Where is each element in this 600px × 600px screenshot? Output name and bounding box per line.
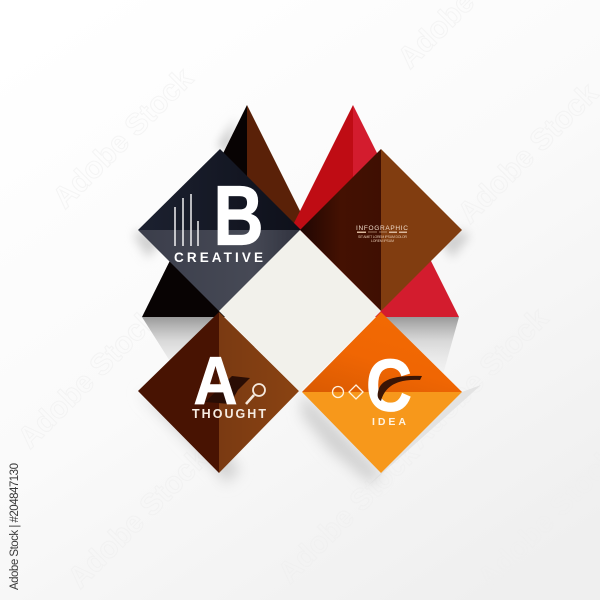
icon: diamond bbox=[349, 385, 363, 399]
panel: diamond B creative bbox=[138, 149, 301, 311]
letter A: A bbox=[194, 343, 238, 419]
swoosh shadow bbox=[205, 376, 250, 404]
label: thought: THOUGHT bbox=[192, 407, 266, 421]
panel: diamond A thought bbox=[138, 312, 299, 473]
panel: center cream diamond bbox=[219, 230, 381, 392]
letter B: B bbox=[214, 168, 264, 262]
panel: diamond infographic bbox=[300, 149, 462, 311]
watermark text: Adobe Stock bbox=[272, 437, 425, 590]
swoosh bbox=[378, 376, 422, 401]
heading underline bbox=[357, 232, 407, 233]
letter C: C bbox=[366, 344, 412, 427]
label: idea: IDEA bbox=[372, 416, 406, 428]
panel: diamond C idea bbox=[302, 312, 462, 473]
icon: circle bbox=[332, 386, 344, 398]
infographic heading: INFOGRAPHIC bbox=[356, 225, 408, 232]
infographic body text: SIT AMET LOREM IPSUM DOLOR bbox=[358, 235, 407, 239]
icon: vertical lines bbox=[175, 194, 198, 246]
panel: left triangle bbox=[142, 105, 353, 317]
icon: magnifier bbox=[246, 384, 265, 404]
panel: red triangle bbox=[247, 105, 459, 317]
label: creative: CREATIVE bbox=[174, 250, 263, 265]
watermark text: Adobe Stock bbox=[62, 442, 215, 595]
watermark text: Adobe Stock bbox=[402, 302, 555, 455]
watermark text: Adobe Stock bbox=[47, 62, 200, 215]
side credit text: Adobe Stock | #204847130 bbox=[9, 463, 21, 590]
drop shadows bbox=[134, 118, 481, 487]
panel: diamond infographic: LOREM IPSUM bbox=[371, 239, 394, 243]
watermark text: Adobe Stock bbox=[12, 302, 165, 455]
